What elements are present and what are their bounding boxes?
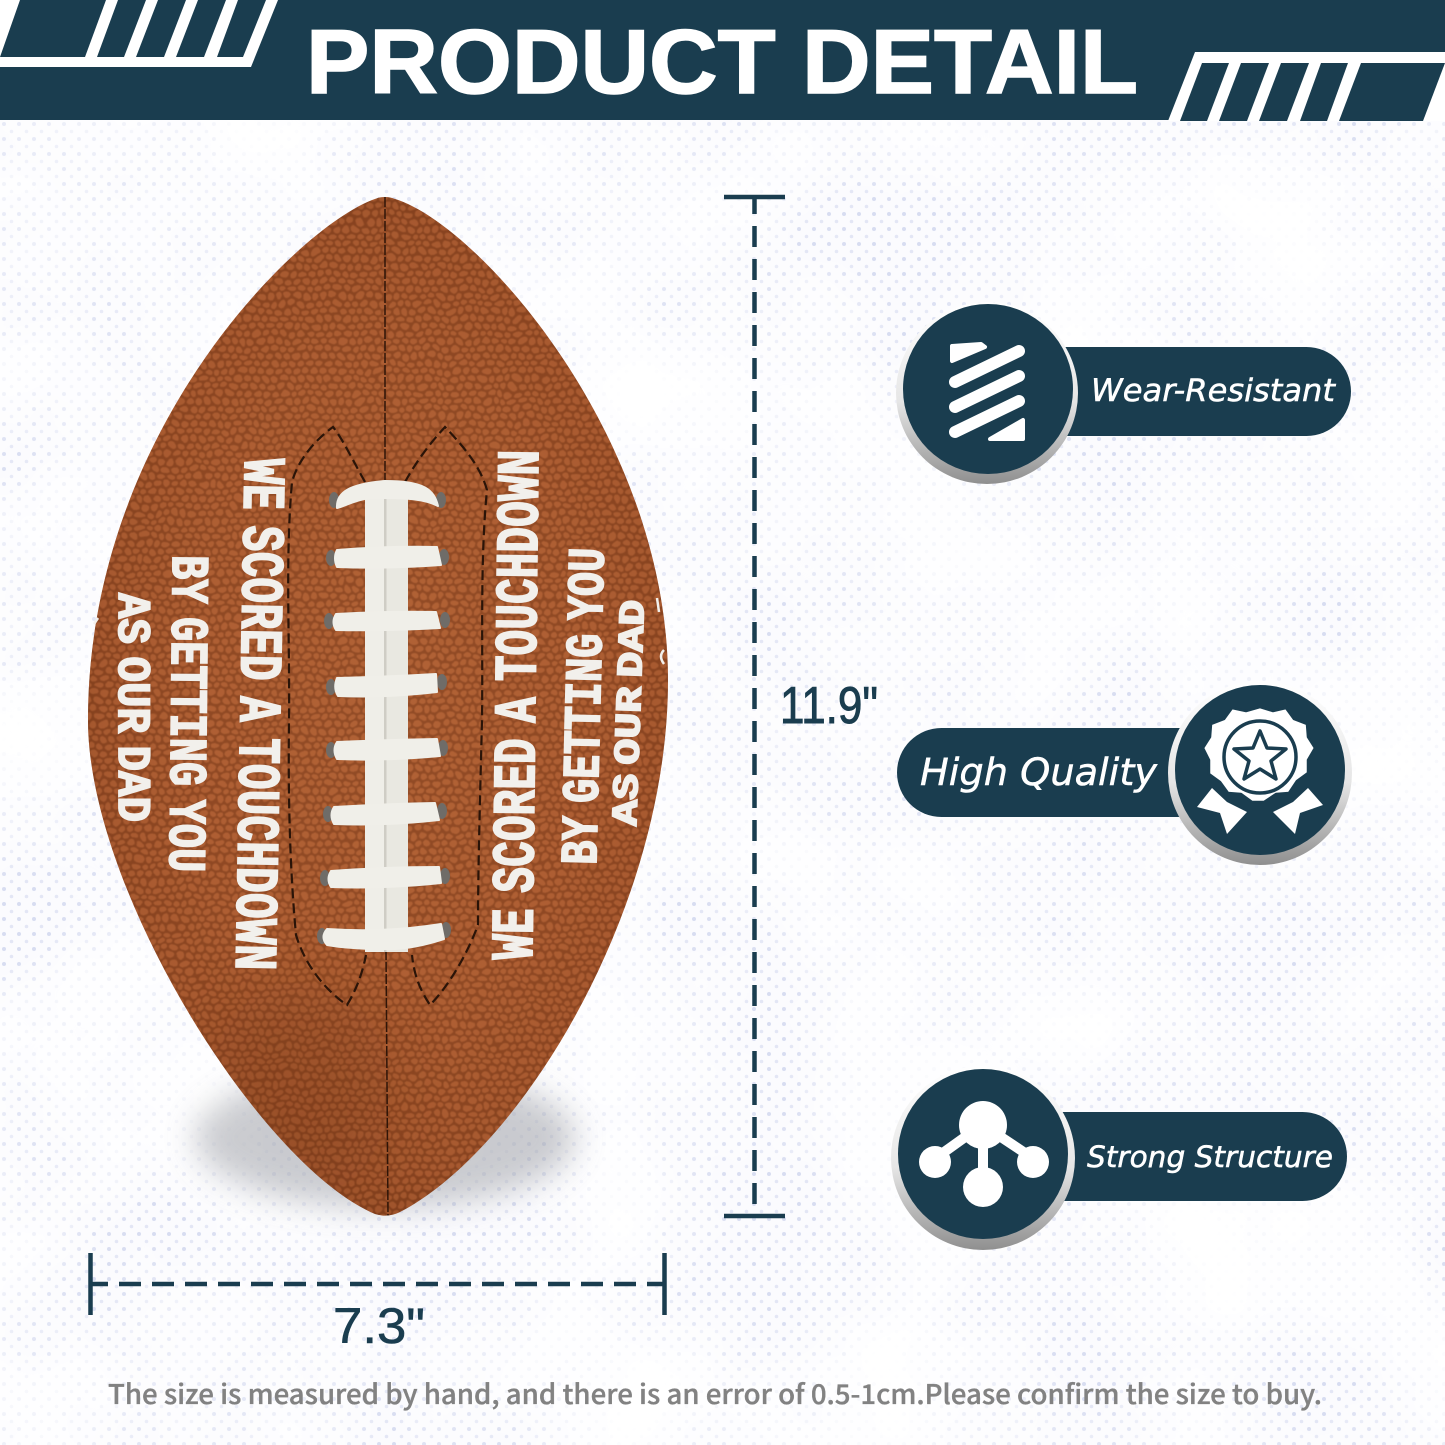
label: Wear-Resistant xyxy=(1091,373,1337,409)
ball text right side xyxy=(483,449,655,960)
ball text right side: WE SCORED A TOUCHDOWN xyxy=(483,449,557,960)
icon: connected nodes xyxy=(919,1101,1049,1207)
title: PRODUCT DETAIL xyxy=(306,12,1138,113)
size disclaimer: The size is measured by hand, and there is an error of 0.5-1cm.Please confirm the size to buy. xyxy=(108,1373,1322,1412)
laces xyxy=(317,481,451,952)
center seam xyxy=(385,197,388,1216)
header banner xyxy=(0,0,1445,121)
width label: 7.3" xyxy=(333,1298,425,1354)
ball text right side: AS OUR DAD xyxy=(606,599,655,826)
badge: wear-resistant xyxy=(896,302,1351,484)
football xyxy=(80,190,680,1225)
label: Strong Structure xyxy=(1087,1140,1333,1174)
header right stripe graphic xyxy=(1168,52,1445,121)
ball text right side: BY GETTING YOU xyxy=(553,547,620,865)
icon: wear stripes xyxy=(952,344,1023,439)
ball text left side: AS OUR DAD xyxy=(105,593,157,822)
lower left shading xyxy=(222,991,386,1180)
width dimension line xyxy=(90,1253,665,1315)
ball shadow xyxy=(195,1068,575,1208)
label: High Quality xyxy=(920,751,1158,794)
ball text left side: BY GETTING YOU xyxy=(154,555,217,872)
height label: 11.9" xyxy=(780,677,878,735)
ball text left side: WE SCORED A TOUCHDOWN xyxy=(217,458,294,971)
clipped edge marks xyxy=(94,598,664,664)
badge: high quality xyxy=(897,681,1352,865)
badge: strong structure xyxy=(891,1066,1347,1250)
stitched panels xyxy=(288,427,487,1005)
height dimension line xyxy=(724,197,785,1216)
ball text left side xyxy=(105,458,294,971)
leather pebble texture xyxy=(80,190,680,1225)
icon: rosette ribbon xyxy=(1197,707,1323,834)
header left stripe graphic xyxy=(0,0,278,67)
